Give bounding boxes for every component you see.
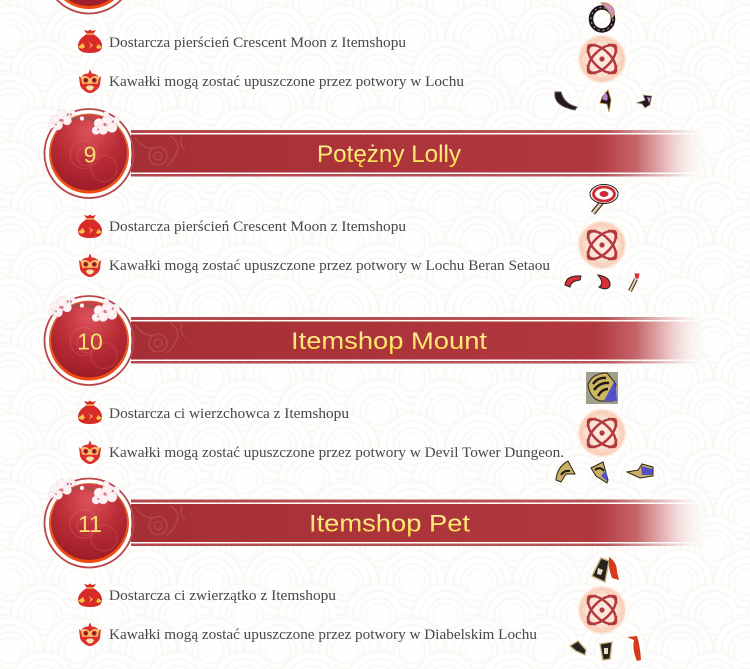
heading banner <box>131 500 711 546</box>
heading banner: Itemshop Pet <box>309 510 470 538</box>
text: drop description: Kawałki mogą zostać upuszczone przez potwory w Diabelskim Lochu <box>109 627 537 643</box>
number badge 11 <box>44 478 134 568</box>
panel: section 9 Potężny Lolly <box>44 109 711 291</box>
icon: combine emblem <box>578 220 626 270</box>
icon: reward bag <box>78 214 102 238</box>
heading banner <box>131 130 711 176</box>
icon: combine emblem <box>578 408 626 458</box>
number badge 10: 10 <box>77 328 103 354</box>
text: reward description: Dostarcza pierścień Crescent Moon z Itemshopu <box>109 35 406 51</box>
icon: mount pieces <box>556 461 653 483</box>
icon: pet pieces <box>570 636 641 661</box>
icon: crescent moon ring <box>591 3 614 30</box>
number badge 9: 9 <box>84 142 96 168</box>
panel: section 11 Itemshop Pet <box>44 478 711 661</box>
number badge 10 <box>44 296 134 385</box>
icon: lion mask <box>79 253 101 277</box>
icon: reward bag <box>78 584 102 607</box>
icon: lollipop <box>590 184 618 213</box>
icon: reward bag <box>78 30 102 53</box>
text: reward description: Dostarcza ci zwierzątko z Itemshopu <box>109 588 336 604</box>
icon: ring pieces <box>555 90 652 112</box>
icon: combine emblem <box>578 586 626 634</box>
icon: reward bag <box>78 400 102 424</box>
heading banner: Itemshop Mount <box>291 328 487 355</box>
icon: lion mask <box>79 69 101 93</box>
number badge: cropped at top <box>44 0 134 14</box>
heading banner <box>131 317 711 364</box>
panel: section 10 Itemshop Mount <box>44 296 711 483</box>
text: reward description: Dostarcza ci wierzchowca z Itemshopu <box>109 406 349 422</box>
icon: lion mask <box>79 622 101 646</box>
icon: lollipop pieces <box>565 273 640 291</box>
number badge 9 <box>44 109 134 198</box>
text: drop description: Kawałki mogą zostać upuszczone przez potwory w Lochu Beran Setaou <box>109 258 550 274</box>
text: drop description: Kawałki mogą zostać upuszczone przez potwory w Devil Tower Dungeon. <box>109 445 564 461</box>
icon: pet talisman <box>592 557 619 582</box>
icon: mount seal <box>586 372 618 404</box>
icon: combine emblem <box>578 34 626 84</box>
text: drop description: Kawałki mogą zostać upuszczone przez potwory w Lochu <box>109 74 464 90</box>
panel: section 8 remainder <box>44 0 652 112</box>
number badge 11: 11 <box>78 511 102 537</box>
text: reward description: Dostarcza pierścień Crescent Moon z Itemshopu <box>109 219 406 235</box>
icon: lion mask <box>79 440 101 464</box>
heading banner: Potężny Lolly <box>317 141 461 168</box>
